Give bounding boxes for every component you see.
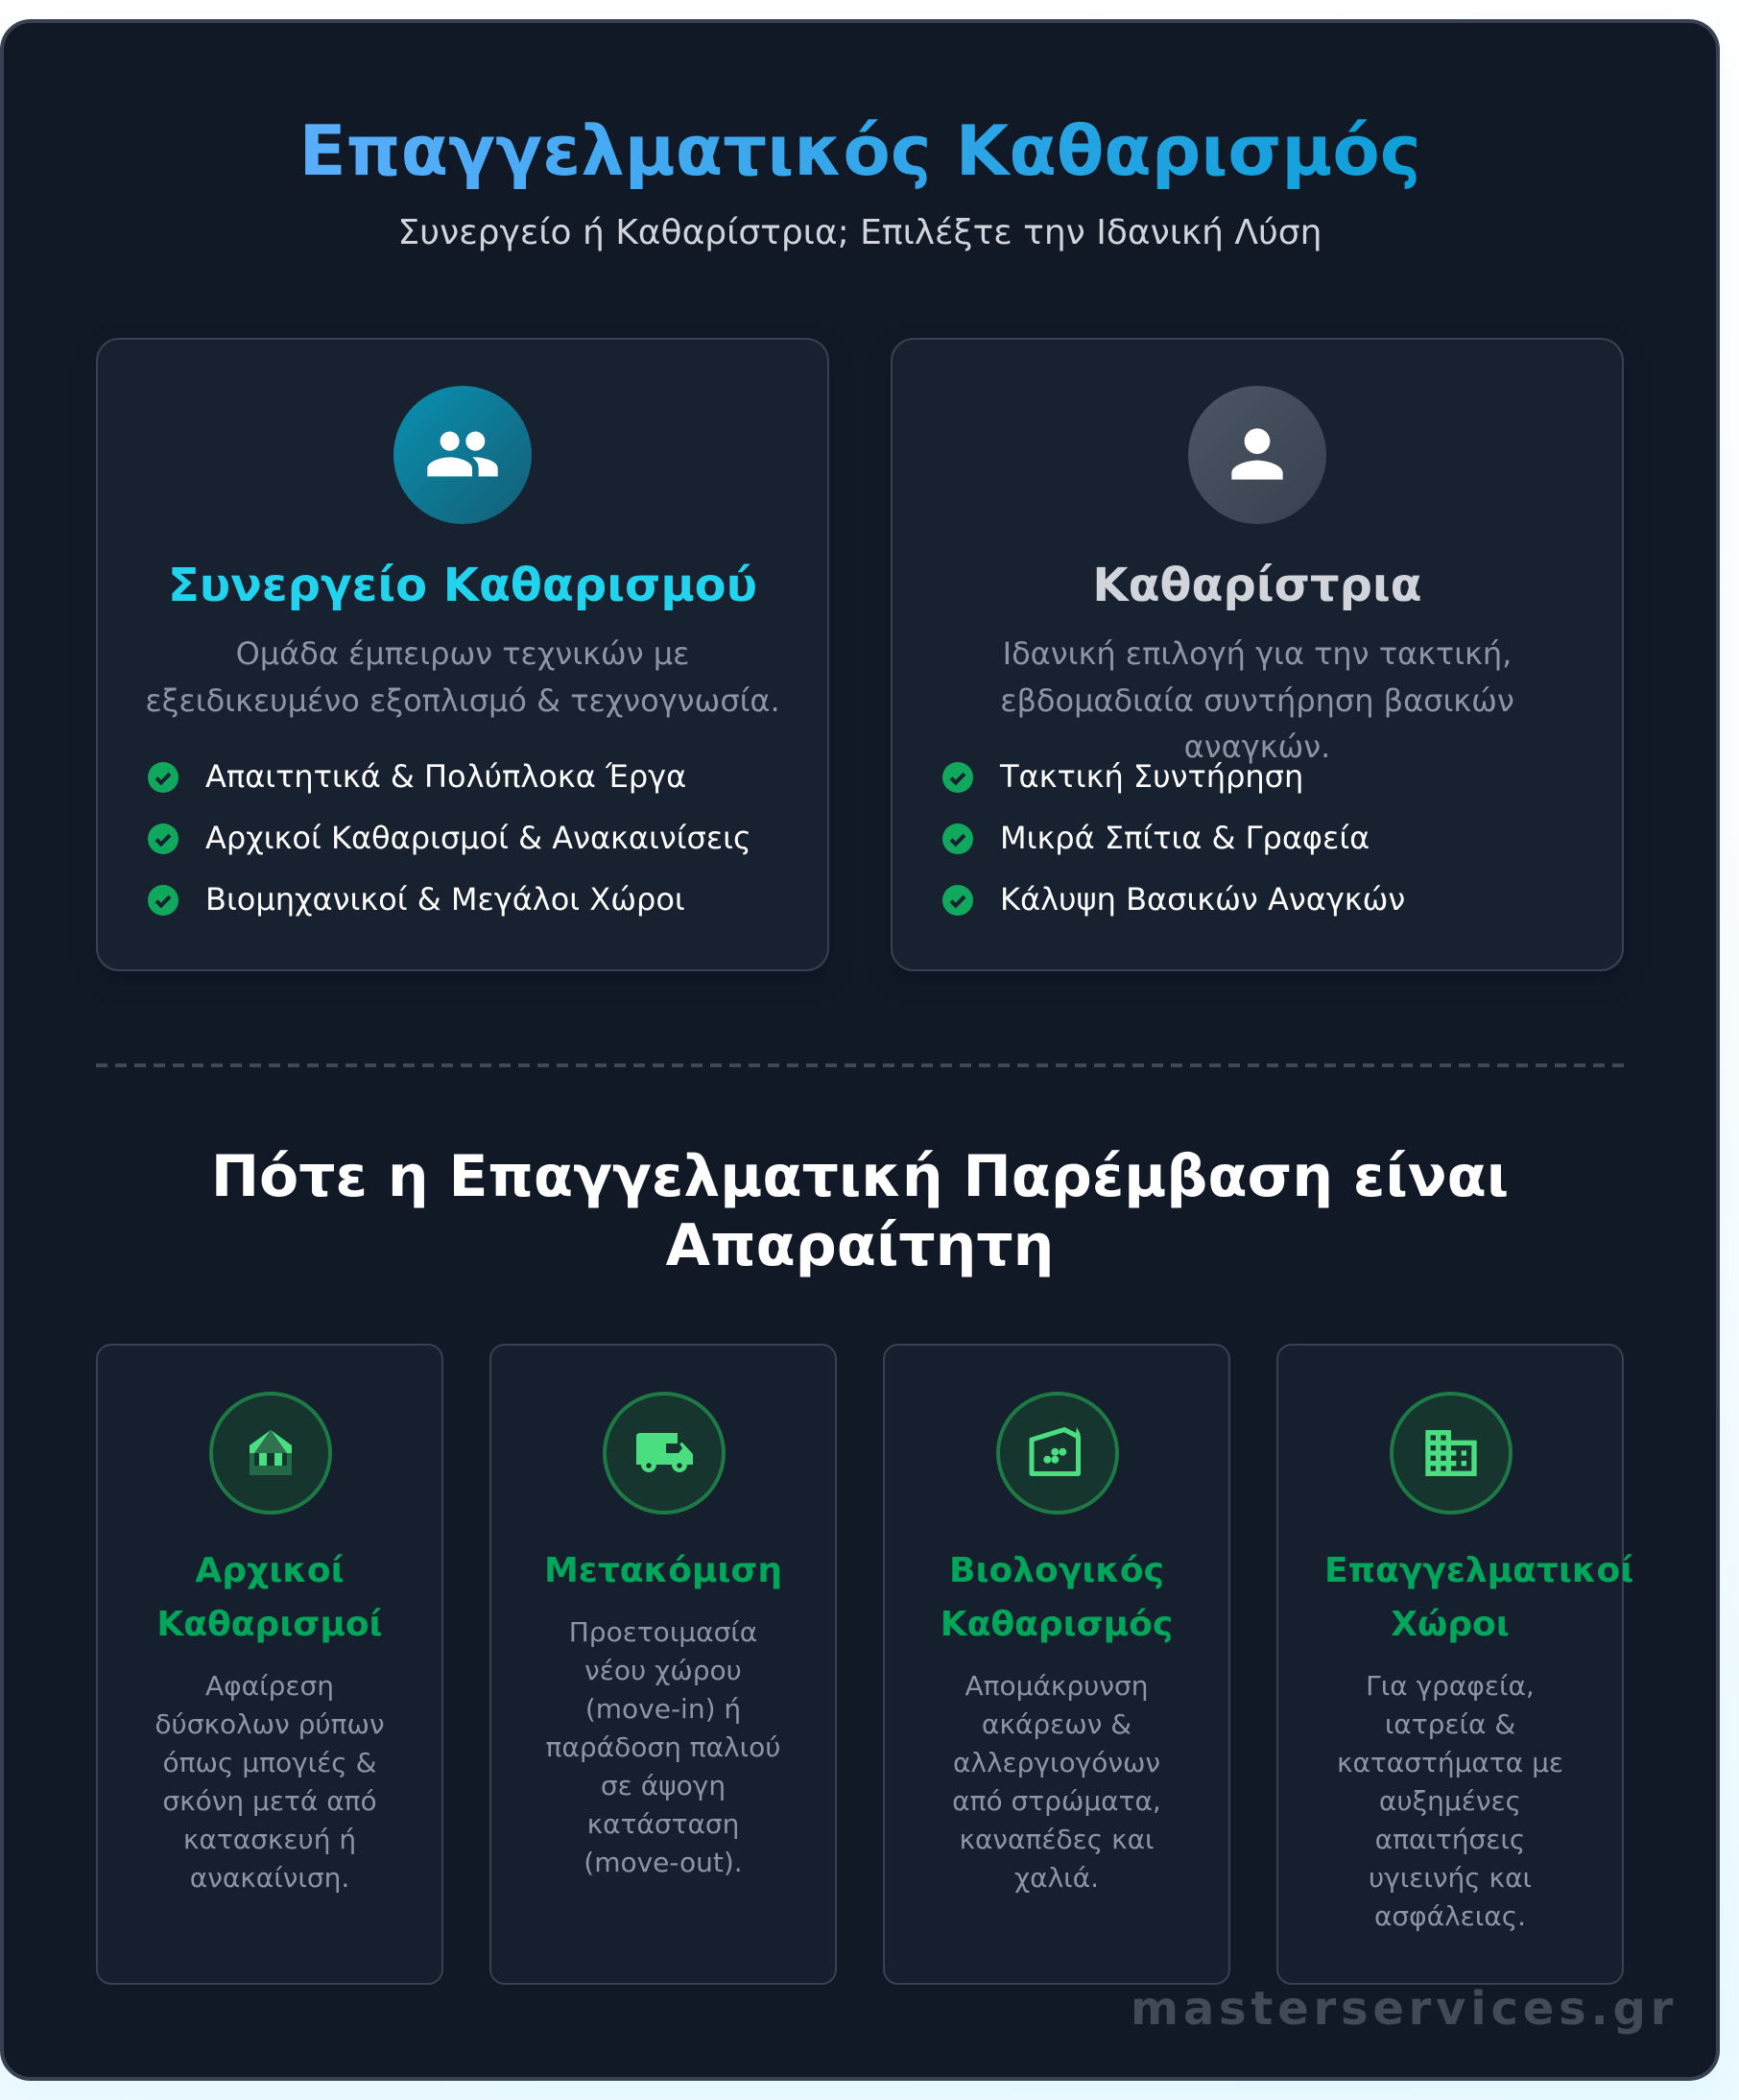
list: crew features: Απαιτητικά & Πολύπλοκα Έργα (205, 758, 686, 795)
heading: biological cleaning: Καθαρισμός (941, 1605, 1173, 1644)
text: moving: (move-in) ή (585, 1693, 741, 1725)
icon: truck (603, 1392, 726, 1515)
text: professional spaces: ασφάλειας. (1374, 1900, 1526, 1932)
section heading (211, 1143, 1509, 1279)
panel: moving (489, 1344, 837, 1985)
heading: biological cleaning (941, 1551, 1173, 1644)
heading: professional spaces: Επαγγελματικοί (1324, 1551, 1633, 1590)
subtitle: Συνεργείο ή Καθαρίστρια; Επιλέξτε την Ιδανική Λύση (398, 213, 1322, 252)
text: biological cleaning: αλλεργιογόνων (953, 1747, 1160, 1778)
text: professional spaces: ιατρεία & (1385, 1708, 1515, 1740)
text: biological cleaning: ακάρεων & (982, 1708, 1132, 1740)
heading: professional spaces (1324, 1551, 1633, 1644)
text: moving: Προετοιμασία (569, 1616, 757, 1648)
text: professional spaces: απαιτήσεις (1375, 1824, 1525, 1855)
heading: cleaner: Καθαρίστρια (1092, 559, 1422, 612)
text: professional spaces: καταστήματα με (1337, 1747, 1563, 1778)
list: crew features (148, 758, 751, 918)
text: initial cleaning: κατασκευή ή (183, 1824, 356, 1855)
heading: crew: Συνεργείο Καθαρισμού (168, 559, 757, 612)
heading: initial cleaning (156, 1551, 383, 1644)
section heading: Πότε η Επαγγελματική Παρέμβαση είναι (211, 1143, 1509, 1210)
list: cleaner features: Μικρά Σπίτια & Γραφεία (1000, 820, 1370, 856)
icon: cleaner (1188, 386, 1326, 524)
panel: professional spaces (1276, 1344, 1624, 1985)
list: crew features: Αρχικοί Καθαρισμοί & Ανακαινίσεις (205, 820, 751, 856)
icon: office building (1390, 1392, 1513, 1515)
text: moving (546, 1616, 780, 1878)
text: initial cleaning: όπως μπογιές & (163, 1747, 376, 1778)
watermark: masterservices.gr (1131, 1982, 1678, 2036)
text: crew description: Ομάδα έμπειρων τεχνικών με (236, 635, 689, 672)
text: cleaner description: αναγκών. (1184, 728, 1330, 765)
icon: crew (393, 386, 532, 524)
heading: initial cleaning: Αρχικοί (195, 1551, 345, 1590)
text: initial cleaning (155, 1670, 385, 1894)
text: initial cleaning: σκόνη μετά από (162, 1785, 377, 1817)
text: professional spaces: Για γραφεία, (1366, 1670, 1535, 1702)
panel: biological cleaning (883, 1344, 1230, 1985)
icon: house (209, 1392, 332, 1515)
heading: biological cleaning: Βιολογικός (949, 1551, 1164, 1590)
list: cleaner features (942, 758, 1405, 918)
text: professional spaces: αυξημένες (1379, 1785, 1521, 1817)
text: cleaner description: εβδομαδιαία συντήρηση βασικών (1000, 681, 1514, 718)
text: initial cleaning: δύσκολων ρύπων (155, 1708, 385, 1740)
text: crew description (145, 635, 780, 718)
text: cleaner description (1000, 635, 1514, 765)
text: professional spaces: υγιεινής και (1369, 1862, 1532, 1894)
text: initial cleaning: ανακαίνιση. (190, 1862, 349, 1894)
list: cleaner features: Κάλυψη Βασικών Αναγκών (1000, 881, 1405, 918)
text: biological cleaning: από στρώματα, (952, 1785, 1161, 1817)
text: moving: κατάσταση (587, 1808, 739, 1840)
list: crew features: Βιομηχανικοί & Μεγάλοι Χώροι (205, 881, 685, 918)
panel: cleaning crew (96, 338, 829, 971)
text: initial cleaning: Αφαίρεση (205, 1670, 334, 1702)
text: professional spaces (1337, 1670, 1563, 1932)
text: biological cleaning: χαλιά. (1014, 1862, 1099, 1894)
text: biological cleaning: Απομάκρυνση (965, 1670, 1149, 1702)
title: Επαγγελματικός Καθαρισμός (298, 110, 1421, 191)
text: crew description: εξειδικευμένο εξοπλισμό & τεχνογνωσία. (145, 681, 780, 718)
icon: house with particles (996, 1392, 1119, 1515)
text: moving: παράδοση παλιού (546, 1731, 780, 1763)
text: biological cleaning (952, 1670, 1161, 1894)
text: cleaner description: Ιδανική επιλογή για την τακτική, (1003, 635, 1512, 672)
panel: individual cleaner (891, 338, 1624, 971)
heading: professional spaces: Χώροι (1391, 1605, 1510, 1644)
heading: moving: Μετακόμιση (544, 1551, 782, 1590)
text: moving: νέου χώρου (584, 1655, 742, 1686)
section heading: Απαραίτητη (666, 1212, 1054, 1279)
text: moving: σε άψογη (601, 1770, 726, 1802)
text: moving: (move-out). (584, 1847, 743, 1878)
heading: initial cleaning: Καθαρισμοί (156, 1605, 383, 1644)
list: cleaner features: Τακτική Συντήρηση (1000, 758, 1303, 795)
text: biological cleaning: καναπέδες και (959, 1824, 1155, 1855)
panel: initial cleaning (96, 1344, 443, 1985)
